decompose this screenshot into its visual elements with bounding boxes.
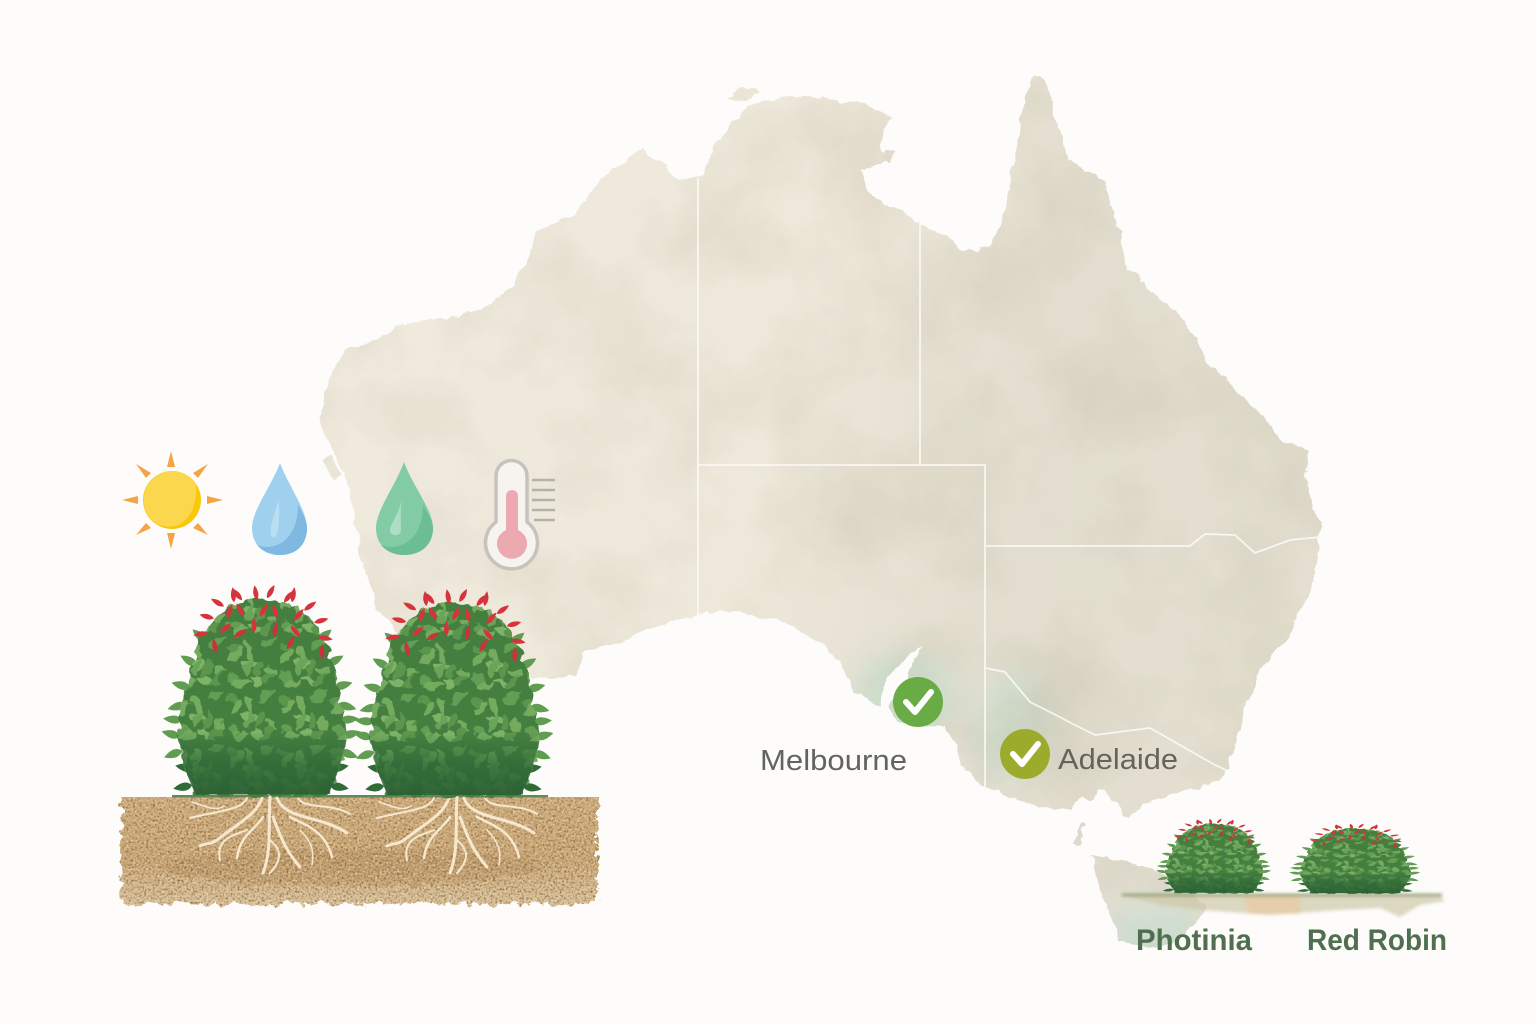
roots of left plant <box>190 797 350 873</box>
roots of right plant <box>377 797 537 873</box>
callout: Adelaide check marker <box>1000 729 1050 779</box>
map of Australia <box>320 73 1320 969</box>
label: Adelaide: Adelaide <box>1058 744 1178 776</box>
callout: Melbourne check marker <box>893 677 943 727</box>
large shrub: left <box>161 584 361 794</box>
Tasmania <box>1090 855 1207 948</box>
label: Red Robin: Red Robin <box>1307 924 1447 957</box>
soil block <box>122 780 598 904</box>
icon: thermometer <box>486 460 555 569</box>
small shrub: Photinia <box>1155 818 1272 893</box>
label: Photinia: Photinia <box>1136 924 1252 957</box>
large shrub: right <box>353 588 554 795</box>
ground line <box>172 795 548 798</box>
mainland landmass <box>320 73 1320 845</box>
icon: green water drop <box>376 462 433 555</box>
small shrub: Red Robin <box>1288 823 1421 893</box>
soil cross-section with roots <box>122 780 598 904</box>
label: Melbourne: Melbourne <box>760 745 907 777</box>
state borders <box>698 178 1320 792</box>
icon: sun <box>122 451 223 549</box>
small ground strip <box>1122 894 1445 917</box>
icon: blue water drop <box>252 463 307 555</box>
